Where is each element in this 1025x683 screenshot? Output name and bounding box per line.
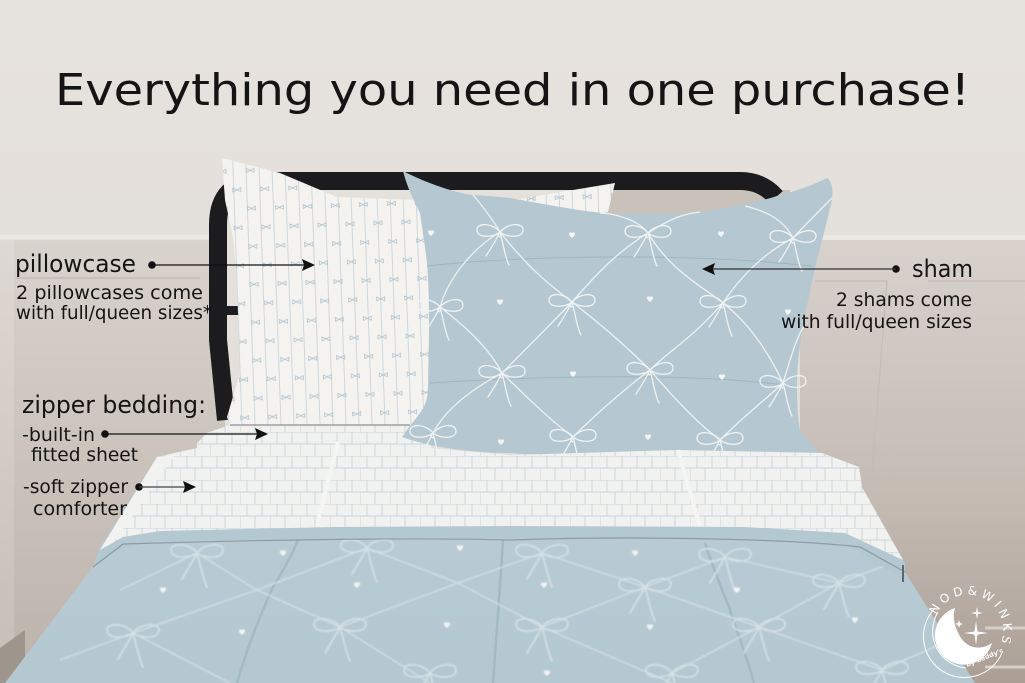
built-in fitted sheet label: fitted sheet xyxy=(31,444,138,466)
soft zipper comforter label: comforter xyxy=(33,498,127,520)
logo wordmark: NOD&WINKS xyxy=(929,586,1012,644)
sham label: with full/queen sizes xyxy=(781,311,972,333)
built-in fitted sheet label: -built-in xyxy=(22,424,95,446)
logo byline: by beddy's xyxy=(965,647,1005,669)
bed frame headboard xyxy=(210,181,776,420)
comforter quilting seams xyxy=(237,540,754,683)
logo: Nod & Winks by beddy's xyxy=(923,586,1012,678)
sham xyxy=(402,171,832,473)
arrow: sham xyxy=(702,263,900,275)
soft zipper comforter label xyxy=(23,476,128,520)
pillowcase label xyxy=(15,250,212,324)
arrow: comforter xyxy=(135,481,196,493)
pillowcase label: with full/queen sizes* xyxy=(16,302,212,324)
logo stars xyxy=(955,607,988,645)
sham label xyxy=(781,255,973,333)
pillowcase xyxy=(222,158,615,425)
logo moon xyxy=(935,608,992,665)
zipper bedding heading: zipper bedding: xyxy=(22,391,206,419)
sham lattice xyxy=(433,195,832,440)
sham seams xyxy=(427,257,812,387)
band hem shadow xyxy=(93,538,905,572)
headboard crossbar xyxy=(210,306,240,315)
pillowcase label: 2 pillowcases come xyxy=(16,282,203,304)
arrow: fitted sheet xyxy=(101,428,268,440)
comforter bow lattice xyxy=(60,540,950,683)
sham label: sham xyxy=(912,255,973,283)
sham label: 2 shams come xyxy=(836,289,972,311)
built-in fitted sheet label xyxy=(22,424,138,466)
blue comforter xyxy=(5,536,975,683)
arrow: pillowcase xyxy=(148,259,315,271)
comforter folded band xyxy=(93,440,905,582)
logo rings xyxy=(923,608,1002,678)
pillowcase label: pillowcase xyxy=(15,250,136,278)
fitted sheet xyxy=(197,424,440,456)
band seams xyxy=(317,442,700,526)
title: Everything you need in one purchase! xyxy=(55,65,970,116)
soft zipper comforter label: -soft zipper xyxy=(23,476,128,498)
sham bows xyxy=(477,225,523,265)
